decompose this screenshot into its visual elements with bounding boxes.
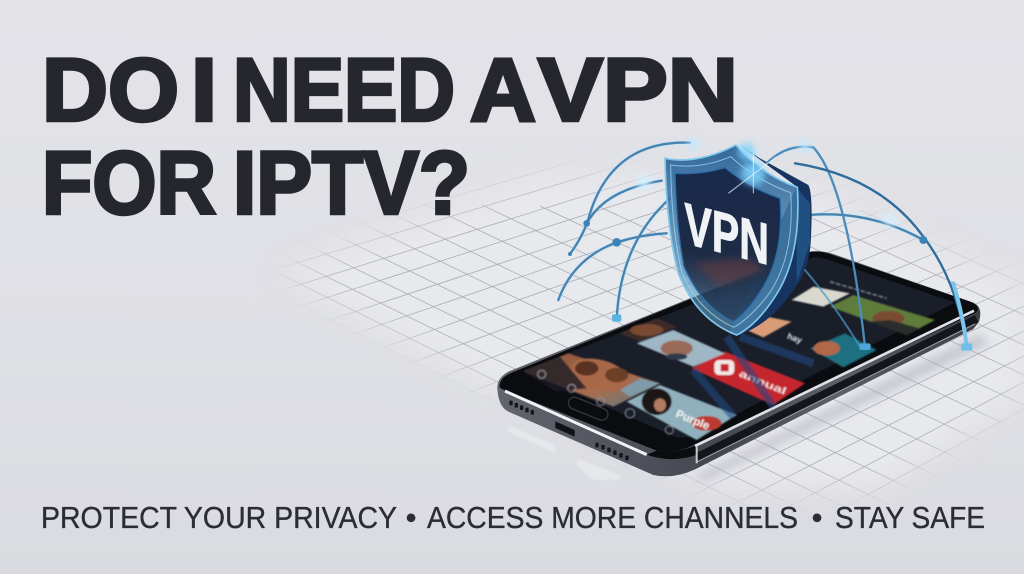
thumbnail: group photo	[523, 353, 660, 407]
illustration: phone and VPN shield	[497, 138, 990, 480]
glow highlights	[636, 138, 897, 227]
phone	[497, 251, 980, 476]
title: IPTV?	[233, 132, 470, 232]
side button	[883, 352, 913, 366]
nav icons	[538, 370, 673, 434]
shield rim	[665, 145, 798, 335]
perspective grid floor	[282, 162, 1024, 506]
right speaker	[595, 443, 629, 460]
thumbnail: woman with dark hair: Purple	[674, 408, 711, 433]
charging port	[555, 421, 575, 437]
thumbnail: woman with dark hair	[627, 385, 737, 440]
phone shadow	[693, 333, 990, 480]
thumbnail: newsreader: hay	[786, 331, 804, 345]
thumbnail: brown portrait	[620, 318, 677, 342]
thumbnail: white card	[792, 287, 850, 307]
title: VPN	[538, 39, 738, 139]
thumbnail: green field	[830, 295, 935, 335]
thumbnail: newsreader	[786, 331, 877, 367]
home button	[567, 395, 610, 422]
white front edge	[505, 391, 647, 455]
silver right edge	[695, 311, 974, 446]
title: FOR	[42, 132, 216, 232]
thumbnail: red banner	[692, 352, 805, 405]
connection arcs behind the shield	[558, 143, 923, 320]
connection arcs in front	[767, 147, 967, 347]
tagline: STAY SAFE	[835, 500, 985, 535]
tagline: •	[812, 500, 822, 535]
infographic canvas	[43, 56, 1024, 528]
shield label: VPN	[684, 190, 769, 278]
blurred screen reflection	[693, 258, 767, 287]
title: DO	[42, 39, 179, 139]
tagline: PROTECT YOUR PRIVACY	[41, 500, 397, 535]
tagline: ACCESS MORE CHANNELS	[427, 500, 798, 535]
shield face	[675, 168, 781, 322]
shield inner line	[671, 157, 791, 327]
phone reflection	[508, 425, 620, 480]
phone body	[497, 251, 980, 476]
tagline: •	[406, 500, 416, 535]
display	[523, 257, 955, 438]
thumbnail: red banner: annual	[737, 369, 788, 398]
thumbnail: peach portrait	[747, 317, 792, 337]
title: A	[470, 39, 536, 139]
thumbnail: blue grey portrait	[637, 330, 725, 367]
vpn shield	[665, 145, 812, 336]
black corner	[647, 445, 697, 459]
shield depth	[728, 145, 812, 336]
connector nodes	[568, 220, 972, 351]
left speaker	[509, 401, 534, 415]
title: NEED	[233, 39, 455, 139]
phone glass	[499, 252, 978, 452]
blue light streaks	[693, 337, 813, 417]
screen content	[523, 282, 935, 440]
title: I	[191, 39, 217, 139]
status text	[830, 282, 887, 298]
tagline	[41, 500, 985, 535]
title	[42, 39, 738, 232]
